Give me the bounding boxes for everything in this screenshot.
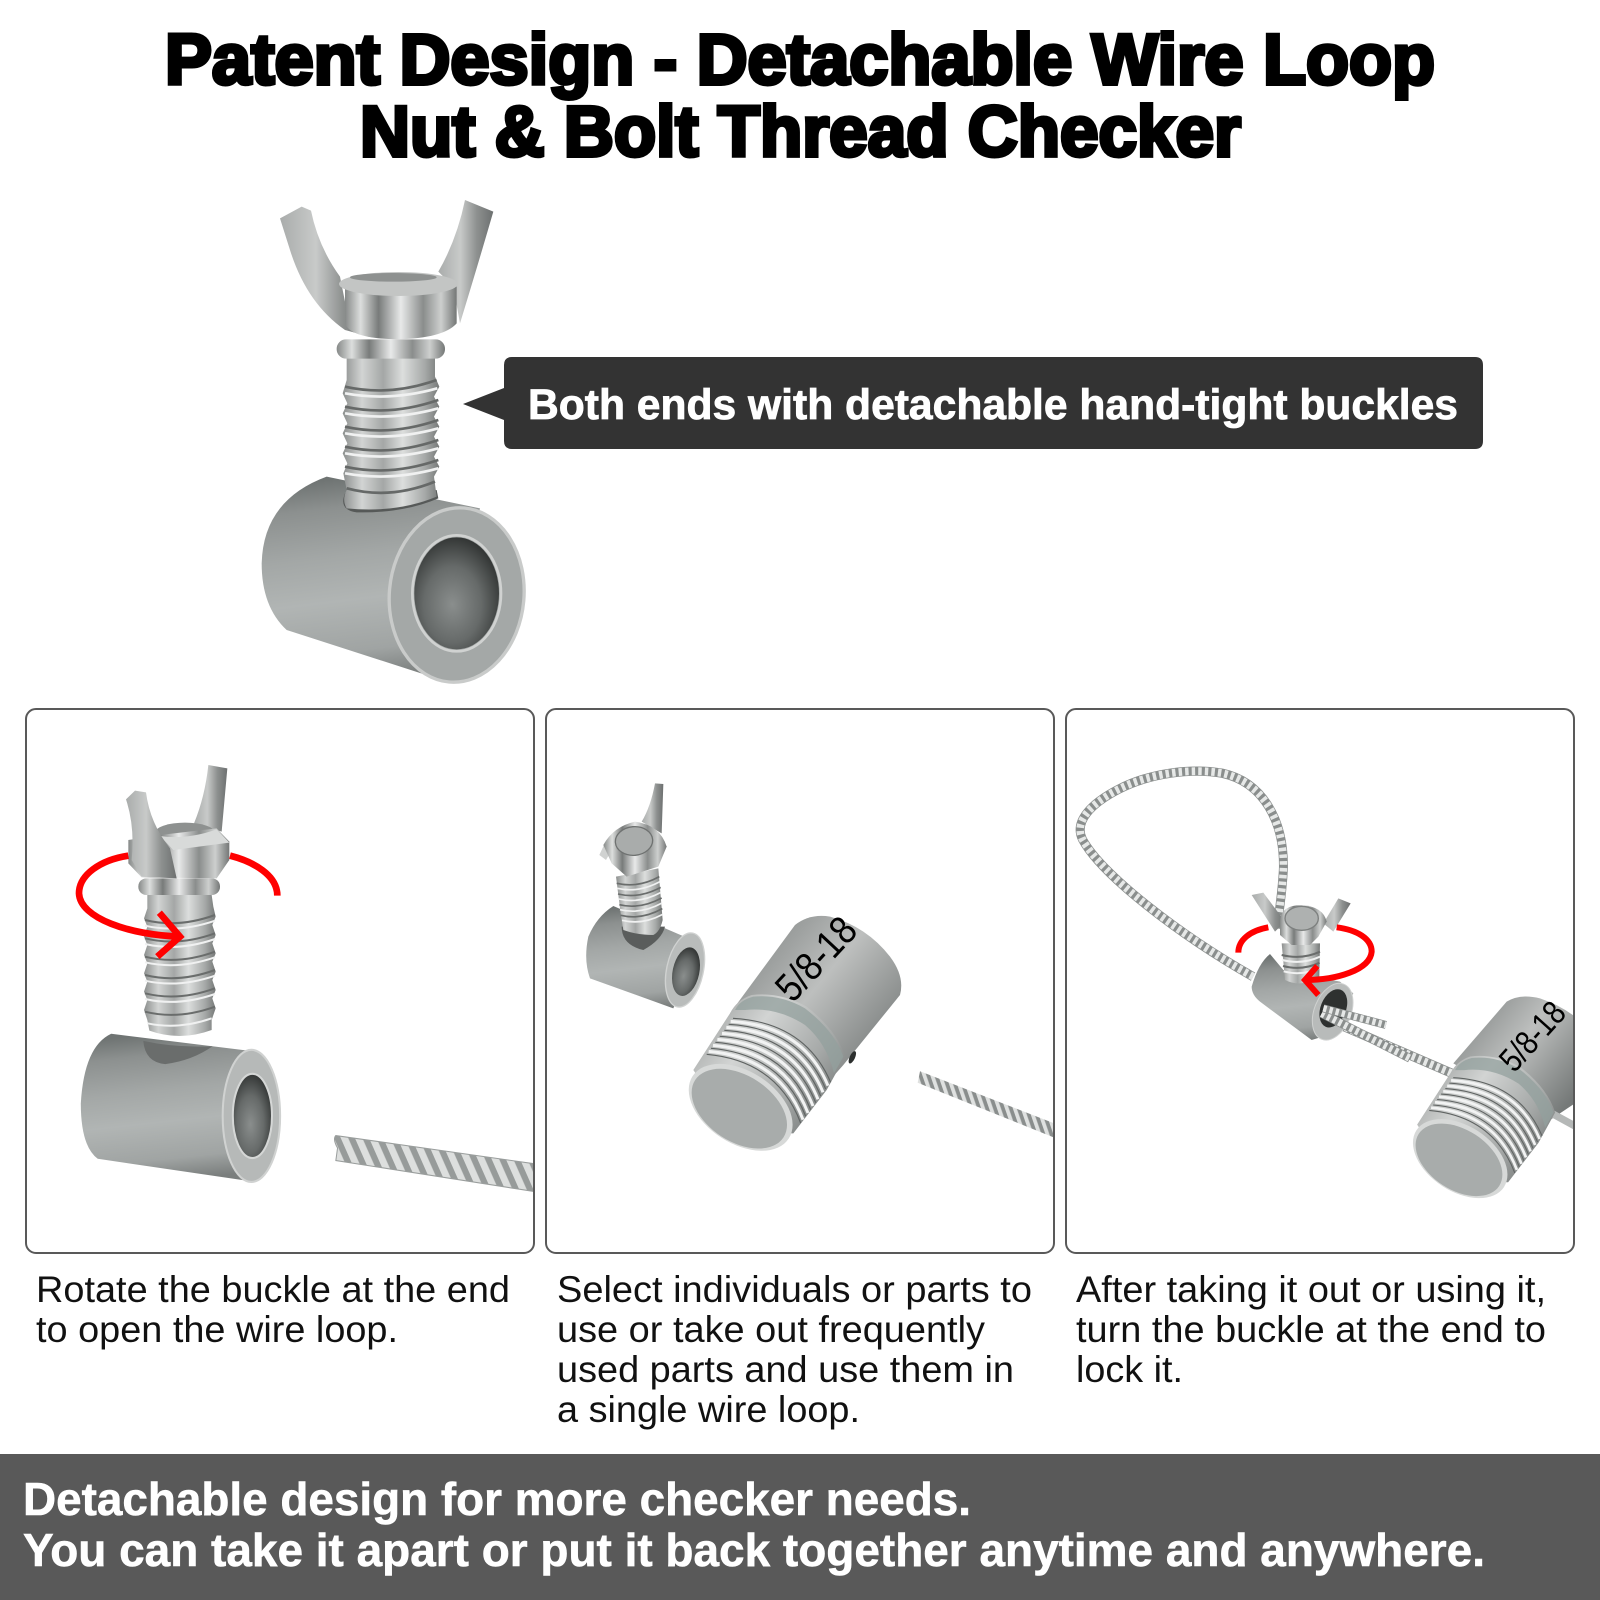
bolt thread bbox=[343, 358, 439, 509]
thread size label: 5/8-18 bbox=[767, 908, 866, 1010]
panel: lock the buckle bbox=[1066, 709, 1575, 1253]
barrel end face and bore bbox=[382, 502, 531, 688]
illustration: buckle on wire bbox=[1238, 893, 1410, 1058]
caption: panel 3: turn the buckle at the end to bbox=[1076, 1309, 1546, 1350]
caption: panel 2: use or take out frequently bbox=[557, 1309, 985, 1350]
caption: panel 3: lock it. bbox=[1076, 1349, 1183, 1390]
caption: panel 1 bbox=[36, 1269, 510, 1350]
caption: panel 3: After taking it out or using it, bbox=[1076, 1269, 1546, 1310]
collar bbox=[337, 339, 445, 359]
title: Nut & Bolt Thread Checker bbox=[360, 93, 1241, 172]
panel: rotate to open bbox=[26, 709, 537, 1253]
caption: panel 3 bbox=[1076, 1269, 1546, 1390]
footer banner: Detachable design for more checker needs. bbox=[23, 1473, 971, 1525]
thread size label: 5/8-18 bbox=[1492, 994, 1574, 1079]
wire loop bbox=[1080, 771, 1451, 1073]
illustration: wire segment bbox=[918, 1071, 1053, 1137]
caption: panel 2 bbox=[557, 1269, 1032, 1430]
title bbox=[165, 21, 1435, 172]
main illustration: wing nut buckle bbox=[262, 200, 531, 688]
caption: panel 2: used parts and use them in bbox=[557, 1349, 1014, 1390]
caption: panel 2: a single wire loop. bbox=[557, 1389, 860, 1430]
caption: panel 1: to open the wire loop. bbox=[36, 1309, 398, 1350]
callout: detachable buckles: Both ends with detachable hand-tight buckles bbox=[528, 381, 1458, 429]
illustration: barrel and wire bbox=[81, 1034, 537, 1192]
illustration: bolt and wing nut bbox=[79, 765, 277, 1036]
barrel body bbox=[262, 477, 480, 678]
red rotation arrow bbox=[1238, 927, 1372, 995]
callout: detachable buckles bbox=[463, 357, 1483, 449]
red rotation arrow bbox=[79, 856, 277, 957]
footer banner: You can take it apart or put it back together anytime and anywhere. bbox=[23, 1524, 1485, 1576]
checker body with wire exit bbox=[1453, 996, 1575, 1126]
large checker thread and face bbox=[1413, 1056, 1555, 1198]
panel: select parts bbox=[546, 709, 1054, 1253]
nut head bbox=[339, 272, 458, 339]
illustration: thread checker bbox=[688, 916, 902, 1151]
left wing bbox=[280, 207, 370, 335]
caption: panel 2: Select individuals or parts to bbox=[557, 1269, 1032, 1310]
illustration: small buckle bbox=[586, 783, 711, 1011]
caption: panel 1: Rotate the buckle at the end bbox=[36, 1269, 510, 1310]
title: Patent Design - Detachable Wire Loop bbox=[165, 21, 1435, 100]
right wing bbox=[438, 200, 493, 323]
thread slot bbox=[343, 490, 438, 512]
footer banner bbox=[0, 1454, 1600, 1600]
